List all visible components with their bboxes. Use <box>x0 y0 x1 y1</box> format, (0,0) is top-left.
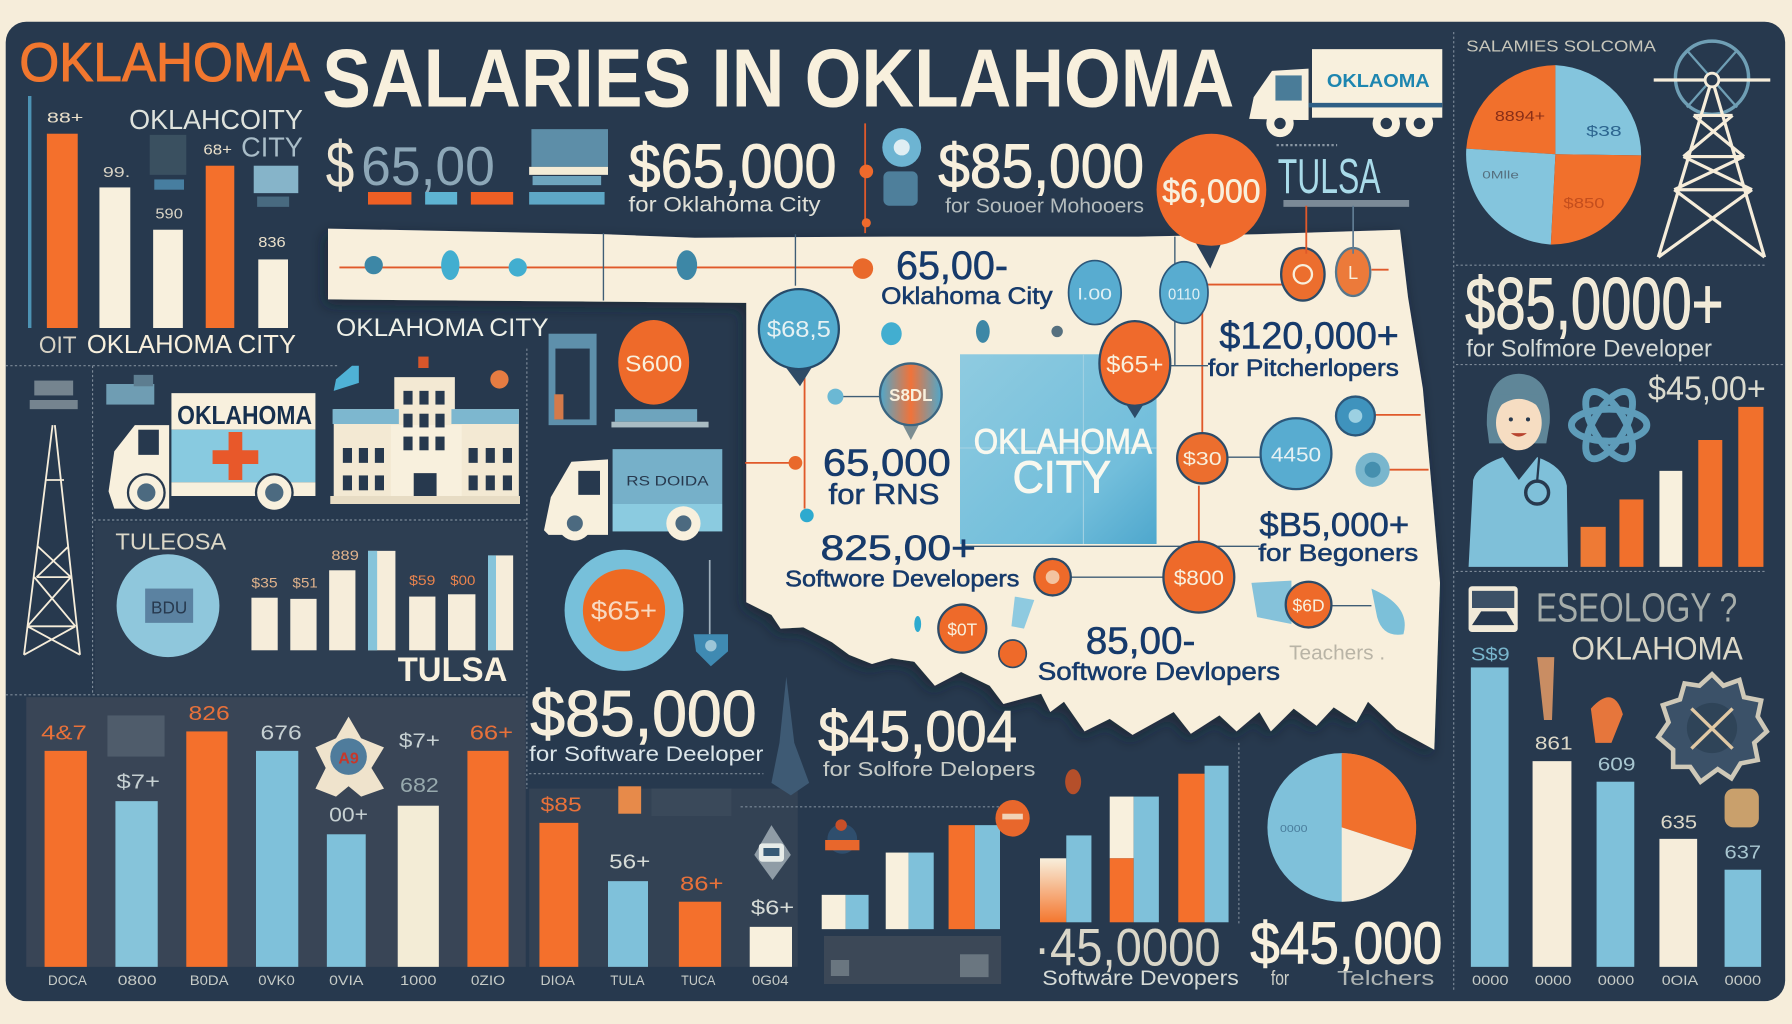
callout: orange 5600: S600 <box>625 350 682 376</box>
pie chart: top right: $850 <box>1563 196 1605 212</box>
bar chart: top left: 88+ <box>47 110 83 126</box>
badge: orange ring 65+ <box>565 550 683 671</box>
bar chart: bottom left: DOCA <box>48 973 88 988</box>
stat: 45,000 software developers: Software Devopers <box>1042 965 1239 990</box>
icon: pin with shield <box>694 560 728 666</box>
bar chart: Tulsa: $51 <box>293 575 318 590</box>
stat: 65,00 <box>326 128 513 205</box>
stat: 65,00: $ <box>326 128 354 202</box>
icon: top truck <box>1249 49 1442 137</box>
icon: truck middle <box>544 449 722 541</box>
icon: small screen tile <box>106 375 154 405</box>
icon: tower right <box>1654 41 1770 257</box>
icon: orange badge <box>995 769 1081 837</box>
icon: lines tile <box>107 715 165 757</box>
pins: blue pair <box>1069 261 1208 325</box>
icon: printer <box>529 129 608 205</box>
bar chart: bottom left: 0VK0 <box>258 973 295 988</box>
icon: ambulance: OKLAHOMA <box>177 400 312 430</box>
text: 85,000 for beginners: $B5,000+ <box>1259 507 1409 544</box>
title: SALARIES IN OKLAHOMA <box>322 33 1234 124</box>
bar chart: Tulsa <box>251 548 513 650</box>
bar chart: bottom left: $85 <box>541 793 582 816</box>
nodes: lower map: $6D <box>1293 595 1325 615</box>
pins: orange top right <box>1281 248 1370 301</box>
callout: orange 5600 <box>618 320 689 405</box>
stat: 85,000 software developer: $85,000 <box>530 677 757 750</box>
stat: 65,000: $65,000 <box>629 132 837 201</box>
text: 65,00 Oklahoma City: 65,00- <box>896 244 1008 288</box>
label: Esecology: ESEOLOGY ? <box>1536 585 1737 631</box>
bar chart: right column: 0OIA <box>1662 973 1699 988</box>
stat: 85,000: $85,000 <box>938 132 1144 201</box>
panel: tulsa backdrop <box>95 522 526 694</box>
icon: Tulsa badge: BDU <box>151 598 187 618</box>
pin: orange 6,000 <box>1157 134 1266 269</box>
bar chart: bottom left <box>41 702 794 988</box>
region: Oklahoma City block <box>960 354 1157 544</box>
bar chart: top left: 68+ <box>203 142 232 158</box>
icon: paper stack <box>611 409 709 427</box>
bar chart: bottom left: $7+ <box>117 771 160 794</box>
connector lines from Tulsa <box>1306 206 1353 254</box>
bar chart: right column: 0000 <box>1725 973 1762 988</box>
nodes: middle right: 4450 <box>1271 444 1321 467</box>
icon: connector with nodes <box>859 123 921 233</box>
text: 85,00 software developers: 85,00- <box>1086 620 1195 662</box>
icon: left tower <box>24 381 80 655</box>
stat: 85,000: for Souoer Mohooers <box>945 195 1144 218</box>
bar chart: bottom left: 66+ <box>470 721 513 744</box>
icon: diamond badge <box>754 825 791 880</box>
stat: 45,000 teachers: for <box>1271 967 1289 990</box>
bar chart: bottom left: 0800 <box>118 973 157 988</box>
pin: blue 68,5 <box>759 289 839 386</box>
bar chart: paired bars group one <box>822 825 1000 929</box>
bar chart: right column <box>1471 644 1762 988</box>
text: 120,000: $120,000+ <box>1219 315 1399 357</box>
icon: column chart tile <box>549 334 597 425</box>
bar chart: bottom left: 56+ <box>609 851 650 874</box>
bar chart: right column: 635 <box>1661 812 1697 833</box>
text: 85,00 software developers <box>1038 620 1280 686</box>
text: 65,00 Oklahoma City: Oklahoma City <box>881 283 1053 310</box>
stat: 85,0000+: for Solfmore Developer <box>1466 336 1712 363</box>
pins: orange top right: L <box>1348 262 1358 283</box>
label: Tulsa top: TULSA <box>1278 150 1381 204</box>
nurse illustration <box>1469 374 1568 567</box>
bar chart: Tulsa: 889 <box>331 548 359 563</box>
bar chart: Tulsa: $00 <box>450 573 476 588</box>
stat: 45,000 teachers: Telchers <box>1337 967 1434 990</box>
map connector lines <box>339 233 1429 606</box>
nodes: middle right <box>1177 397 1390 489</box>
icon: star badge <box>315 717 384 797</box>
bar chart: bottom left: $7+ <box>399 729 440 752</box>
label: Oklahoma lower right: OKLAHOMA <box>1571 630 1743 666</box>
stat: 45,004: for Solfore Delopers <box>823 758 1035 781</box>
text: 85,000 for beginners <box>1258 507 1418 567</box>
bar chart: bottom left: TUCA <box>681 973 716 988</box>
bar chart: bottom left: TULA <box>610 973 645 988</box>
bar chart: bottom left: 0VIA <box>329 973 364 988</box>
pie chart: top right: 8894+ <box>1495 109 1545 125</box>
bar chart: top left <box>30 96 288 328</box>
pie chart: bottom right: 0000 <box>1280 824 1308 835</box>
stat: 45,000 software developers: ·45,0000 <box>1034 919 1221 978</box>
label: Salaries Solcoma: SALAMIES SOLCOMA <box>1466 38 1656 55</box>
bar chart: bottom left: 676 <box>261 721 302 744</box>
icon: gear <box>1658 674 1767 782</box>
bar chart: bottom left: 826 <box>189 702 230 725</box>
bar chart: right column: 0000 <box>1598 973 1635 988</box>
bar chart: Tulsa: $59 <box>409 573 435 588</box>
bar chart: bottom left: 682 <box>400 774 439 797</box>
pin: orange 65+: $65+ <box>1106 352 1163 379</box>
label: Tuleosa: TULEOSA <box>115 529 227 555</box>
nodes: lower map <box>914 542 1405 667</box>
map: Oklahoma state <box>328 229 1440 750</box>
stat: 85,0000+ <box>1465 264 1723 363</box>
bar chart: right column: 0000 <box>1472 973 1509 988</box>
icons: small right objects <box>1537 657 1759 827</box>
bar chart: bottom left: 0ZIO <box>471 973 505 988</box>
text: 825,00 software developers: Softwore Developers <box>785 565 1019 591</box>
nodes: lower map: $800 <box>1174 565 1224 590</box>
bar chart: bottom left: B0DA <box>190 973 230 988</box>
pie chart: top right: 0Mlle <box>1482 169 1519 181</box>
panel: bottom chart backdrop <box>26 697 526 967</box>
bar chart: top left: 836 <box>258 235 286 251</box>
pie chart: top right: $38 <box>1586 124 1622 140</box>
icon: ambulance <box>109 393 315 511</box>
icon: document tile <box>1469 586 1518 632</box>
bar chart: right column: 861 <box>1535 733 1573 754</box>
text: 65,00 Oklahoma City <box>881 244 1053 310</box>
text: 120,000 <box>1208 315 1399 382</box>
text: 85,000 for beginners: for Begoners <box>1258 540 1418 567</box>
pie chart: top right <box>1466 65 1641 245</box>
icon: star badge: A9 <box>338 750 359 767</box>
icon: person badge <box>825 819 859 854</box>
bar chart: Tulsa: $35 <box>251 575 278 590</box>
icon: hospital <box>330 357 520 504</box>
bar chart: bottom left: 4&7 <box>41 721 87 744</box>
text: 65,000 for RNs: for RNS <box>829 479 939 511</box>
bar chart: right column: 637 <box>1725 841 1761 862</box>
pin: orange 65+ <box>1099 321 1170 418</box>
text: teachers faded: Teachers . <box>1289 641 1385 664</box>
stat: 45,004: $45,004 <box>818 700 1017 764</box>
icon: spire <box>771 677 809 795</box>
badge: orange ring 65+: $65+ <box>591 595 657 625</box>
bar chart: top left: 590 <box>155 206 183 222</box>
label: Oklahoma City mid: OKLAHOMA CITY <box>336 314 549 342</box>
map dots in panhandle <box>365 250 1063 522</box>
text: 85,00 software developers: Softwore Devlopers <box>1038 658 1280 686</box>
text: 65,000 for RNs <box>823 441 951 511</box>
nodes: lower map: $0T <box>947 619 978 639</box>
text: 120,000: for Pitcherlopers <box>1208 355 1399 382</box>
pin: orange 6,000: $6,000 <box>1162 173 1261 210</box>
bar chart: top left: 99. <box>103 165 130 181</box>
nodes: middle right: $30 <box>1183 448 1222 469</box>
stat: 65,00: 65,00 <box>361 135 495 197</box>
stat: 85,000 software developer: for Software Deeloper <box>529 741 763 766</box>
heading: Oklahoma: OKLAHOMA <box>19 31 310 93</box>
label: 45,00+: $45,00+ <box>1648 370 1766 408</box>
pins: blue pair: 0110 <box>1168 286 1200 303</box>
pin: mixed: S8DL <box>889 385 933 405</box>
label: Tulsa lower: TULSA <box>398 651 507 689</box>
pin: blue 68,5: $68,5 <box>767 316 831 342</box>
pie chart: bottom right <box>1267 753 1416 902</box>
bar chart: bottom left: 1000 <box>400 973 437 988</box>
text: 825,00 software developers: 825,00+ <box>821 528 976 568</box>
pin: mixed <box>880 363 942 440</box>
label: city under chart: OKLAHOMA CITY <box>87 329 296 359</box>
label: city under chart: OIT <box>39 332 77 359</box>
bar chart: right column: 0000 <box>1535 973 1572 988</box>
panel: lower middle chart backdrop <box>529 789 798 967</box>
text: 65,000 for RNs: 65,000 <box>823 441 951 483</box>
stat: 65,000: for Oklahoma City <box>629 191 821 216</box>
icon: Tulsa badge <box>117 554 219 657</box>
text: 825,00 software developers <box>785 528 1019 591</box>
bar chart: right column: S$9 <box>1471 644 1510 665</box>
region: Oklahoma City block: CITY <box>1013 452 1111 503</box>
bar chart: right column: 609 <box>1598 753 1635 774</box>
icon: faded photo tile <box>824 936 1001 984</box>
label: Oklahoma City top left: CITY <box>241 132 303 163</box>
icon: top truck: OKLAOMA <box>1327 70 1430 91</box>
icon: atom <box>1571 384 1647 466</box>
bar chart: bottom left: DIOA <box>541 973 576 988</box>
icon: small chart tile <box>150 135 298 207</box>
icon: small tile row <box>618 786 731 816</box>
label: Oklahoma City top left <box>129 104 303 163</box>
pins: blue pair: l.00 <box>1078 286 1112 303</box>
bar chart: bottom left: 0G04 <box>752 973 789 988</box>
bar chart: bottom left: $6+ <box>751 896 794 919</box>
stat: 45,000 teachers: $45,000 <box>1250 909 1442 976</box>
label: Oklahoma City top left: OKLAHCOITY <box>129 104 303 135</box>
bar chart: bottom left: 86+ <box>680 872 723 895</box>
region: Oklahoma City block: OKLAHOMA <box>974 422 1152 462</box>
bar chart: bottom left: 00+ <box>329 804 368 827</box>
bar chart: paired bars group two <box>1040 766 1229 922</box>
bar chart: nurse salaries <box>1581 407 1763 567</box>
icon: truck middle: RS DOIDA <box>626 474 710 489</box>
